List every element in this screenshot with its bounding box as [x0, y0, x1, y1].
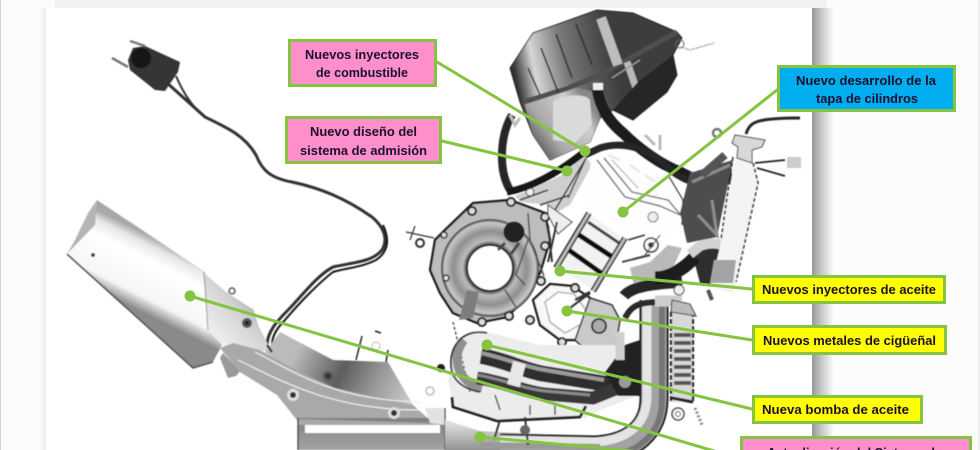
icon: sensor with wiring harness [112, 41, 387, 348]
label: Nuevos metales de cigüeñal: Nuevos metales de cigüeñal [763, 333, 936, 348]
leader: bomba de aceite [482, 340, 752, 409]
leader: inyectores de aceite [554, 266, 752, 289]
label: Nuevo desarrollo de la tapa de cilindros [778, 66, 954, 110]
label: Nuevo diseño del sistema de admisión [286, 118, 440, 162]
label: Nuevos inyectores de combustible: de combustible [316, 65, 408, 80]
intake stack area [515, 155, 592, 262]
ladder tubes [556, 212, 682, 291]
label: Actualización del Sistema de [742, 438, 970, 450]
black hoses [502, 83, 733, 192]
air box [510, 10, 714, 160]
oil sump and lower crankcase [426, 322, 640, 445]
exhaust pipes [445, 300, 668, 450]
label: Nuevos metales de cigüeñal [754, 326, 946, 354]
label: Nueva bomba de aceite: Nueva bomba de aceite [762, 402, 909, 417]
leader lines [184, 62, 777, 450]
upper hoses to header [624, 282, 682, 318]
label: Nuevos inyectores de aceite [754, 276, 944, 302]
leader: tapa de cilindros [618, 90, 777, 218]
leader: lower exhaust point [474, 432, 632, 450]
radiator [655, 118, 801, 300]
engine illustration [67, 10, 801, 450]
label: Nuevo desarrollo de la tapa de cilindros: tapa de cilindros [816, 91, 918, 106]
leader: sistema de escape [184, 290, 714, 450]
label: Nuevos inyectores de combustible: Nuevos inyectores [305, 47, 419, 62]
label: Nuevo diseño del sistema de admisión: Nuevo diseño del [310, 124, 417, 139]
cylinder head with gasket line [568, 157, 688, 280]
label: Nueva bomba de aceite [754, 396, 922, 422]
label: Nuevos inyectores de aceite: Nuevos inyectores de aceite [762, 282, 936, 297]
exhaust mid plate and box [220, 331, 445, 450]
oil cover [526, 277, 620, 352]
crankcase and clutch cover [406, 198, 550, 326]
leader: inyectores de combustible [437, 62, 590, 156]
label: Nuevos inyectores de combustible [290, 40, 436, 86]
shock absorber [671, 285, 702, 425]
lower black pipes [477, 332, 640, 398]
label: Nuevo desarrollo de la tapa de cilindros: Nuevo desarrollo de la [796, 73, 937, 88]
label: Nuevo diseño del sistema de admisión: sistema de admisión [300, 143, 427, 158]
muffler [67, 200, 272, 378]
leader: sistema de admisión [442, 141, 572, 176]
leader: metales de cigüeñal [562, 306, 752, 340]
